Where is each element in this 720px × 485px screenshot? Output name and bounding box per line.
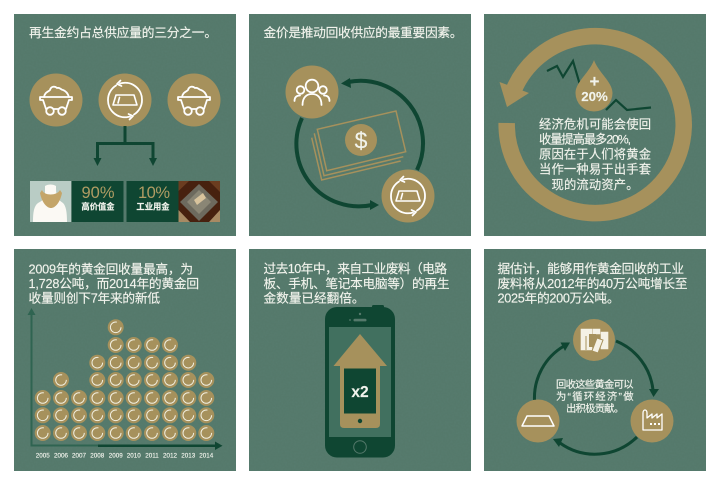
- line chart falling and rising: [547, 61, 651, 110]
- center text: 回收这些黄金可以: [556, 378, 634, 391]
- text block: 收量提高最多20%,: [539, 132, 631, 146]
- icon: dollar coin: [345, 124, 377, 156]
- icon: drop +20%: [576, 60, 612, 112]
- icon: factory: [630, 400, 674, 442]
- year labels: 2009: [109, 452, 123, 460]
- stat: 90% high-value gold: 90%: [82, 184, 115, 202]
- stat: 10% industrial gold: 工业用金: [136, 202, 170, 212]
- chart coins: 2007: [71, 390, 87, 441]
- photo: circuit chip: [178, 181, 220, 222]
- year labels: 2008: [90, 452, 105, 460]
- heading: [264, 261, 450, 306]
- icon: mine cart left: [30, 74, 82, 126]
- year labels: 2014: [199, 452, 214, 460]
- icon: mine cart right: [168, 74, 220, 126]
- icon: recycled gold bar: [98, 74, 152, 126]
- chart coins: 2013: [180, 355, 196, 441]
- icon: gold bar: [516, 400, 560, 442]
- circular arrow: [500, 36, 684, 213]
- heading: 板、手机、笔记本电脑等）的再生: [264, 276, 450, 291]
- panel: economic crisis: [484, 14, 706, 236]
- arrow: up doubling phone: x2: [351, 384, 369, 401]
- chart coins: 2005: [35, 390, 51, 441]
- icon: drop +20%: 20%: [581, 89, 608, 104]
- chart coins: 2010: [126, 337, 142, 441]
- stat: 90% high-value gold: [72, 181, 124, 222]
- heading: 据估计，能够用作黄金回收的工业: [498, 261, 684, 276]
- heading: [28, 262, 199, 306]
- center text: 为“循环经济”做: [556, 390, 634, 403]
- year labels: 2007: [72, 452, 86, 460]
- stat: 10% industrial gold: 10%: [138, 184, 170, 202]
- photo: necklace on bust: [30, 181, 71, 222]
- icon: stack of banknotes: [312, 111, 406, 180]
- heading: 2025年的200万公吨。: [498, 290, 620, 306]
- center text: 出积极贡献。: [566, 402, 624, 415]
- text block: [539, 116, 651, 192]
- icon: drop +20%: +: [590, 72, 600, 91]
- stat: 10% industrial gold: [126, 181, 178, 222]
- panel: circular economy: [484, 249, 706, 471]
- arrow: top to right: [616, 341, 659, 397]
- icon: dollar coin: $: [355, 128, 368, 154]
- icon: smartphone: [325, 305, 395, 458]
- year labels: 2011: [145, 452, 159, 460]
- chart coins: 2014: [198, 372, 214, 441]
- icon: people: [286, 66, 338, 118]
- panel: industrial waste doubled: [249, 249, 471, 471]
- arrows: split into two uses: [94, 126, 157, 166]
- arrow: right to left: [553, 437, 637, 454]
- arrow: top right arc: [341, 78, 423, 170]
- heading: 收量则创下7年来的新低: [28, 290, 160, 306]
- heading: 金数量已经翻倍。: [264, 290, 364, 306]
- year labels: 2005: [36, 452, 50, 460]
- text block: 当作一种易于出手套: [539, 162, 651, 176]
- panel: recycled gold share: [14, 14, 236, 236]
- year labels: 2010: [127, 452, 141, 460]
- icon: recycled gold bar: [382, 170, 434, 222]
- heading: 2009年的黄金回收量最高，为: [28, 262, 193, 276]
- panel: gold recycling by year: [14, 249, 236, 471]
- heading: [498, 261, 688, 306]
- center text: [556, 378, 634, 415]
- arrow: left to top: [534, 342, 570, 400]
- text block: 现的流动资产。: [552, 177, 638, 192]
- year labels: 2006: [54, 452, 68, 460]
- panel: gold price driver: [249, 14, 471, 236]
- heading: 废料将从2012年的40万公吨增长至: [498, 276, 688, 291]
- year labels: 2013: [181, 452, 196, 460]
- chart axes: [28, 308, 222, 450]
- arrow: bottom left arc: [296, 118, 379, 210]
- heading: 1,728公吨，而2014年的黄金回: [28, 276, 199, 291]
- heading: 过去10年中，来自工业废料（电路: [264, 261, 447, 276]
- chart coins: 2012: [162, 337, 178, 441]
- text block: 经济危机可能会使回: [539, 116, 651, 132]
- chart coins: 2008: [89, 355, 105, 441]
- year labels: 2012: [163, 452, 177, 460]
- heading: 再生金约占总供应量的三分之一。: [29, 25, 217, 40]
- icon: documents and devices: [573, 319, 615, 361]
- chart coins: 2006: [53, 372, 69, 441]
- arrow: up doubling phone: [334, 334, 387, 428]
- stat: 90% high-value gold: 高价值金: [81, 202, 115, 212]
- heading: 金价是推动回收供应的最重要因素。: [264, 25, 462, 40]
- year labels: [36, 452, 214, 460]
- text block: 原因在于人们将黄金: [539, 146, 651, 162]
- chart coins: 2011: [144, 337, 160, 441]
- chart coins: 2009: [108, 319, 124, 441]
